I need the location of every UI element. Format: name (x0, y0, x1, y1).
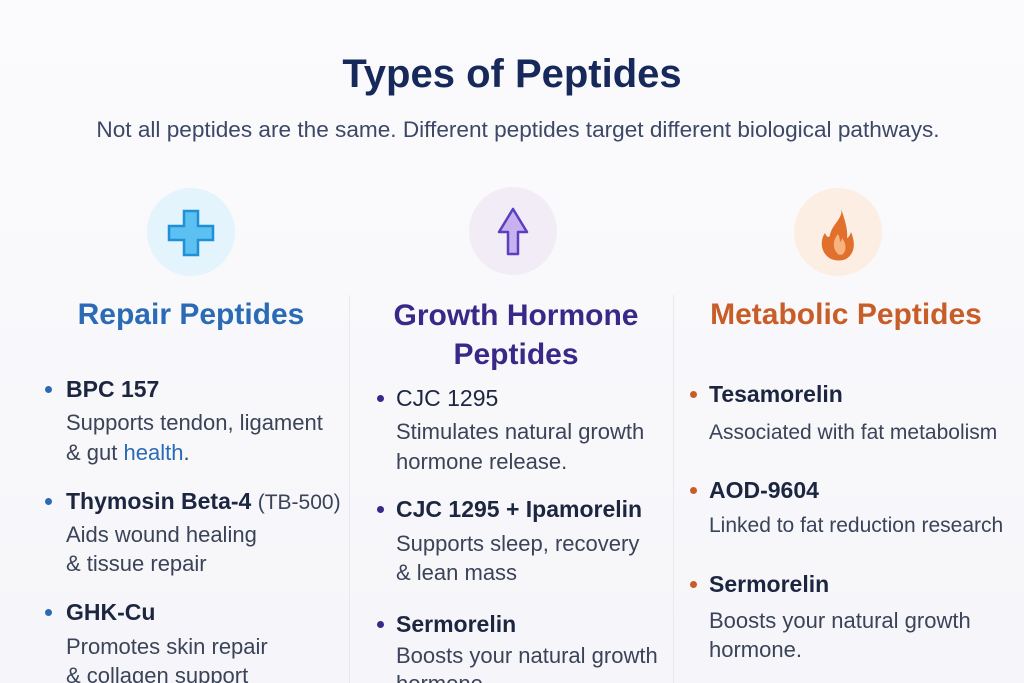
item: CJC 1295 (377, 385, 644, 474)
item: BPC 157: BPC 157 (66, 376, 159, 402)
item: Tesamorelin: Tesamorelin (709, 381, 843, 407)
panel: growth hormone list (377, 385, 658, 683)
item: AOD-9604: AOD-9604 (709, 477, 819, 503)
item: Thymosin: Thymosin Beta-4 (TB-500) (66, 488, 341, 514)
icon: arrow up (469, 187, 557, 275)
panel: repair list (45, 376, 341, 683)
item: CJC 1295: CJC 1295 (396, 385, 498, 411)
item: CJC 1295: Stimulates natural growth (396, 419, 644, 444)
item: Tesamorelin (690, 381, 997, 444)
heading: repair: Repair Peptides (78, 298, 304, 331)
item: GHK-Cu: GHK-Cu (66, 599, 155, 625)
heading: growth hormone: Peptides (453, 338, 579, 371)
title: Types of Peptides (342, 52, 682, 96)
item: Sermorelin: Boosts your natural growth (709, 608, 971, 633)
item: Sermorelin: Sermorelin (396, 611, 516, 637)
icon: cross (147, 188, 235, 276)
item: CJC 1295: hormone release. (396, 449, 567, 474)
item: Sermorelin: hormone. (709, 637, 802, 662)
item: GHK-Cu: Promotes skin repair (66, 634, 268, 659)
item: Sermorelin: Boosts your natural growth (396, 643, 658, 668)
item: CJC+Ipamorelin: CJC 1295 + Ipamorelin (396, 496, 642, 522)
item: Thymosin (45, 488, 341, 576)
item: CJC+Ipamorelin: Supports sleep, recovery (396, 531, 639, 556)
subtitle: Not all peptides are the same. Different peptides target different biological pathways. (96, 117, 940, 142)
heading: growth hormone (394, 299, 638, 371)
item: Thymosin: & tissue repair (66, 551, 207, 576)
item: AOD-9604 (690, 477, 1003, 537)
item: Tesamorelin: Associated with fat metabolism (709, 421, 997, 444)
item: BPC 157: Supports tendon, ligament (66, 410, 323, 435)
item: BPC 157 (45, 376, 323, 465)
heading: growth hormone: Growth Hormone (394, 299, 638, 332)
item: BPC 157: & gut health. (66, 440, 190, 465)
item: Sermorelin (690, 571, 971, 662)
item: CJC+Ipamorelin (377, 496, 642, 585)
heading: metabolic: Metabolic Peptides (710, 298, 982, 331)
item: Sermorelin (377, 611, 658, 683)
item: CJC+Ipamorelin: & lean mass (396, 560, 517, 585)
item: AOD-9604: Linked to fat reduction research (709, 514, 1003, 537)
item: GHK-Cu (45, 599, 268, 683)
panel: metabolic list (690, 381, 1003, 662)
item: Thymosin: Aids wound healing (66, 522, 257, 547)
item: Sermorelin: Sermorelin (709, 571, 829, 597)
icon: flame (794, 188, 882, 276)
